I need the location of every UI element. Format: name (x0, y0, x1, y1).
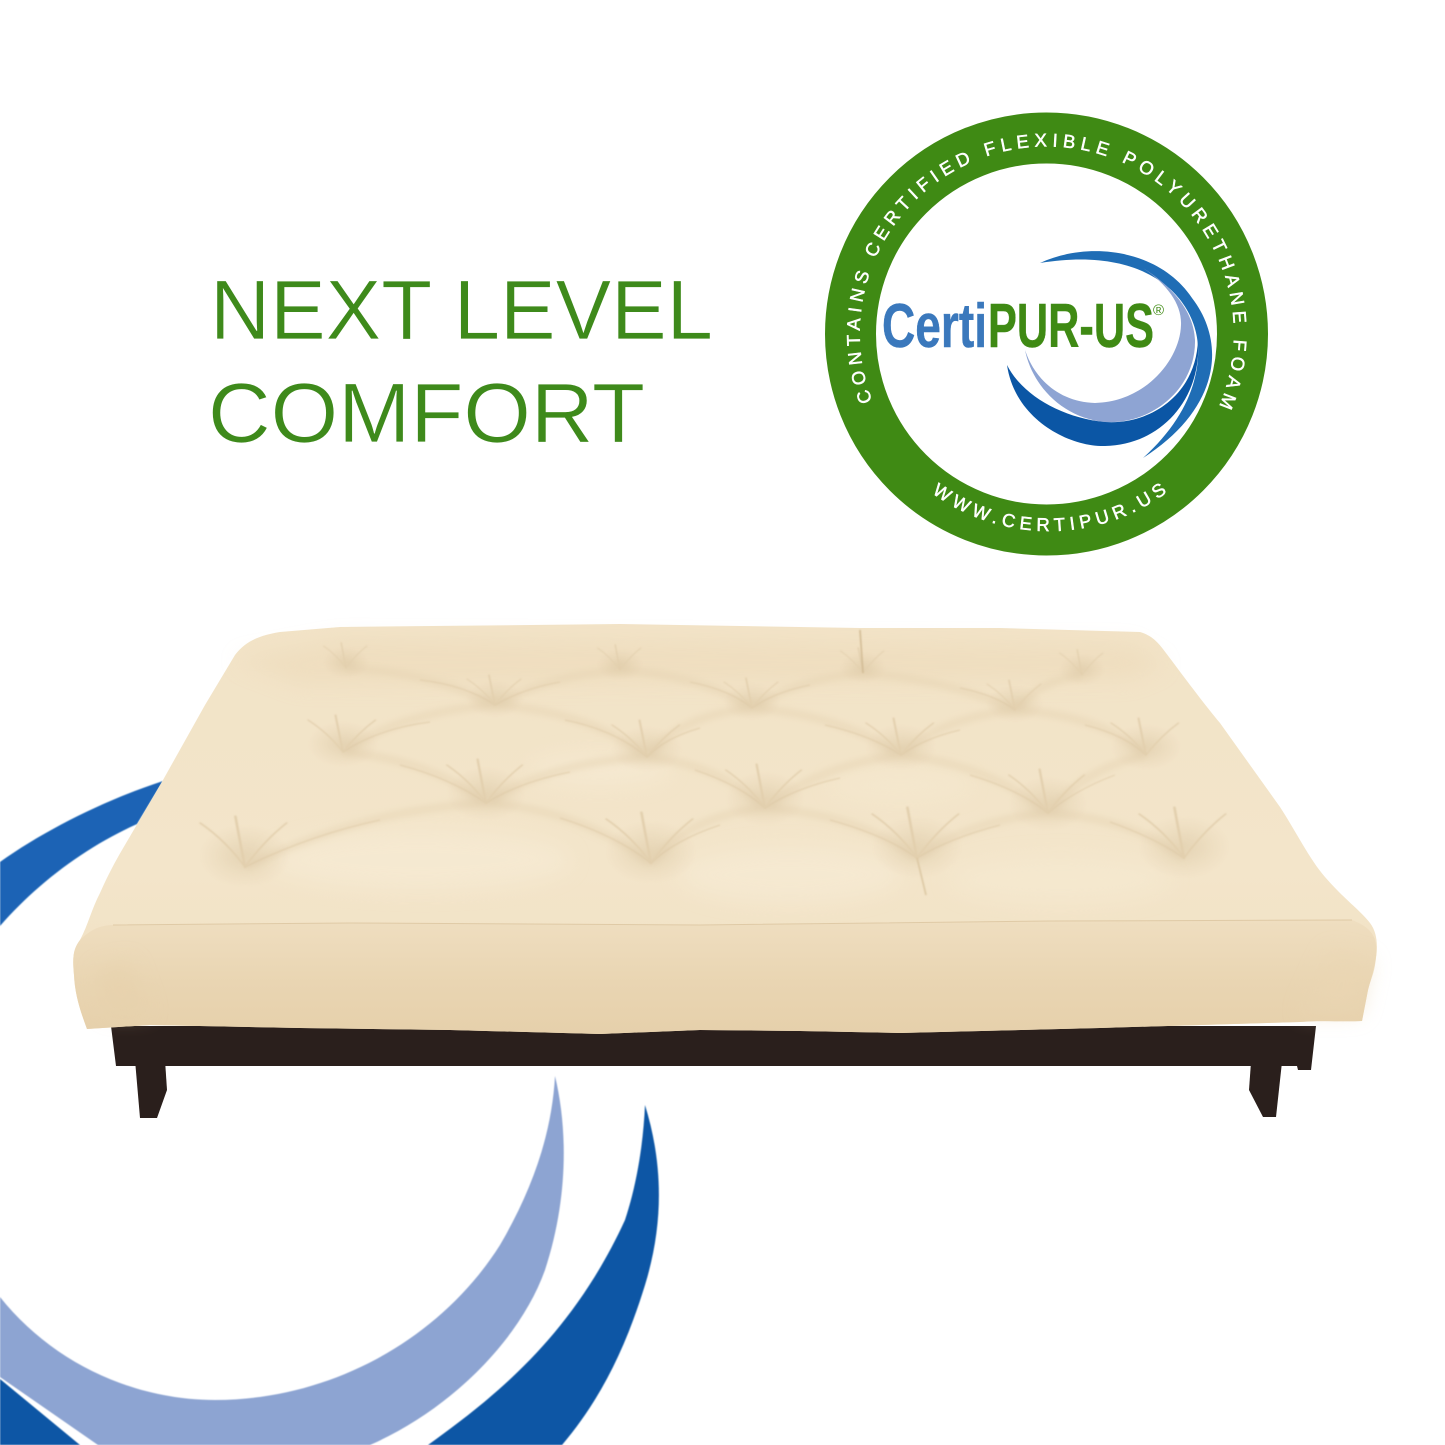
logo wordmark: ® (1153, 302, 1164, 319)
frame legs and rail (111, 1026, 1316, 1118)
logo wordmark: PUR-US (988, 292, 1154, 361)
ring text: contains certified flexible polyurethane foam: CONTAINS CERTIFIED FLEXIBLE POLYURETHANE FOAM (846, 133, 1247, 410)
mattress shading (95, 640, 1372, 1015)
badge: CertiPUR-US certification seal (825, 112, 1268, 556)
ring text: website address: WWW.CERTIPUR.US (934, 482, 1166, 532)
title: next level comfort (208, 263, 713, 460)
product: futon mattress on dark wood frame (73, 624, 1377, 1118)
title: next level comfort: COMFORT (208, 366, 645, 460)
logo swoosh (1007, 251, 1212, 458)
background swoosh: left blue arc (0, 781, 163, 926)
mattress body (73, 624, 1377, 1034)
mattress front panel (73, 920, 1376, 1034)
tuft points (200, 630, 1229, 895)
background swoosh: bottom light blue crescent (0, 1076, 564, 1445)
mattress tufting (200, 630, 1229, 895)
title: next level comfort: NEXT LEVEL (210, 263, 713, 357)
badge green ring (850, 138, 1242, 530)
background swoosh: bottom dark blue crescent (0, 1105, 659, 1445)
logo wordmark: Certi (882, 292, 987, 361)
pillow valleys (soft) (245, 668, 1184, 867)
pillow creases (fine) (245, 680, 1184, 867)
mattress seam (113, 920, 1352, 925)
logo wordmark (882, 292, 1164, 361)
